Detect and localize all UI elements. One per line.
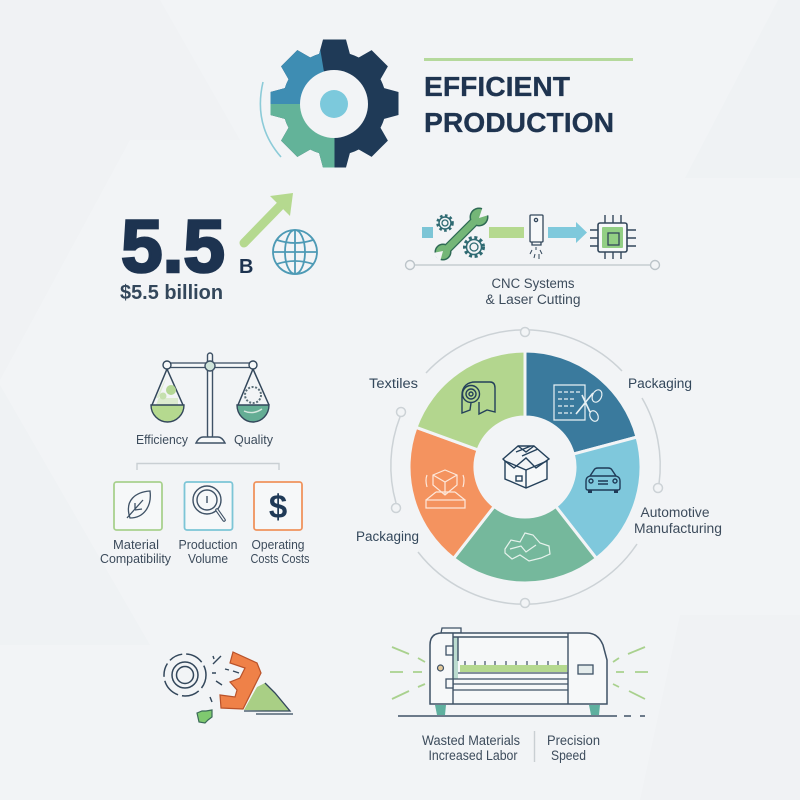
panel: balance and factors xyxy=(100,353,310,566)
icon: laser head xyxy=(530,215,543,259)
label: automotive manufacturing: Manufacturing xyxy=(634,521,722,536)
label: packaging left: Packaging xyxy=(356,529,419,544)
icon: blue square xyxy=(422,227,433,238)
label: automotive manufacturing: Automotive xyxy=(640,505,710,520)
labels: factors: Production xyxy=(178,538,238,552)
box: operating costs xyxy=(254,482,302,530)
unit: B xyxy=(239,256,253,278)
labels: efficiency and quality: Efficiency xyxy=(136,433,189,447)
label: textiles: Textiles xyxy=(369,376,418,391)
labels: wasted materials and increased labor: Wasted Materials xyxy=(422,733,520,748)
segment: packaging orange xyxy=(409,427,494,558)
green bar xyxy=(489,227,524,238)
box: production volume xyxy=(184,482,232,530)
box: operating costs: $ xyxy=(269,488,287,525)
caption: $5.5 billion xyxy=(120,282,223,304)
labels: efficiency and quality xyxy=(136,433,274,447)
icon: orange part on platform xyxy=(426,470,465,508)
icon: document and scissors xyxy=(554,385,604,423)
timeline xyxy=(406,260,660,270)
panel: market size xyxy=(120,193,317,304)
heading: title: EFFICIENT xyxy=(424,71,570,102)
label: automotive manufacturing xyxy=(634,505,722,536)
labels: precision and speed: Speed xyxy=(551,748,586,763)
labels: factors xyxy=(100,538,310,566)
label: CNC Systems xyxy=(492,276,575,291)
icon: fabric roll xyxy=(462,382,495,414)
chart: industries donut xyxy=(356,328,722,608)
outer ring xyxy=(391,328,662,608)
labels: factors: Volume xyxy=(188,552,228,566)
icon: machine xyxy=(390,628,648,716)
box: material compatibility xyxy=(114,482,162,530)
big number: 5.5 xyxy=(121,205,225,288)
heading: title: PRODUCTION xyxy=(424,107,614,138)
icon: scales xyxy=(151,353,269,443)
panel: CNC systems flow xyxy=(406,206,660,307)
icon: waste and target xyxy=(164,652,293,723)
labels: wasted materials and increased labor: Increased Labor xyxy=(428,748,518,763)
segment: green xyxy=(454,506,596,583)
segment: automotive light blue xyxy=(556,437,641,558)
icon: growth arrow xyxy=(244,193,293,243)
icon: gear logo xyxy=(260,40,398,168)
labels: factors: Operating xyxy=(252,538,305,552)
labels: factors: Compatibility xyxy=(100,552,172,566)
label: packaging right: Packaging xyxy=(628,376,692,391)
panel: machine and outcomes xyxy=(390,628,648,763)
labels: precision and speed: Precision xyxy=(547,733,600,748)
label xyxy=(486,276,580,307)
heading: title xyxy=(424,58,633,138)
labels: factors: Costs Costs xyxy=(250,552,310,566)
arrow xyxy=(548,222,587,243)
icon: car xyxy=(586,468,620,493)
icon: globe xyxy=(273,230,317,274)
center hub icon: box xyxy=(503,446,549,488)
icon: wrench and gears xyxy=(433,206,492,262)
label: & Laser Cutting xyxy=(486,292,580,307)
icon: crumpled material xyxy=(505,533,550,561)
labels: precision and speed xyxy=(547,733,600,763)
icon: chip xyxy=(590,215,636,259)
segment: packaging dark blue xyxy=(525,351,637,454)
labels: factors: Material xyxy=(113,538,159,552)
labels: wasted materials and increased labor xyxy=(422,733,520,763)
labels: efficiency and quality: Quality xyxy=(234,433,274,447)
segment: textiles light green xyxy=(416,351,525,450)
